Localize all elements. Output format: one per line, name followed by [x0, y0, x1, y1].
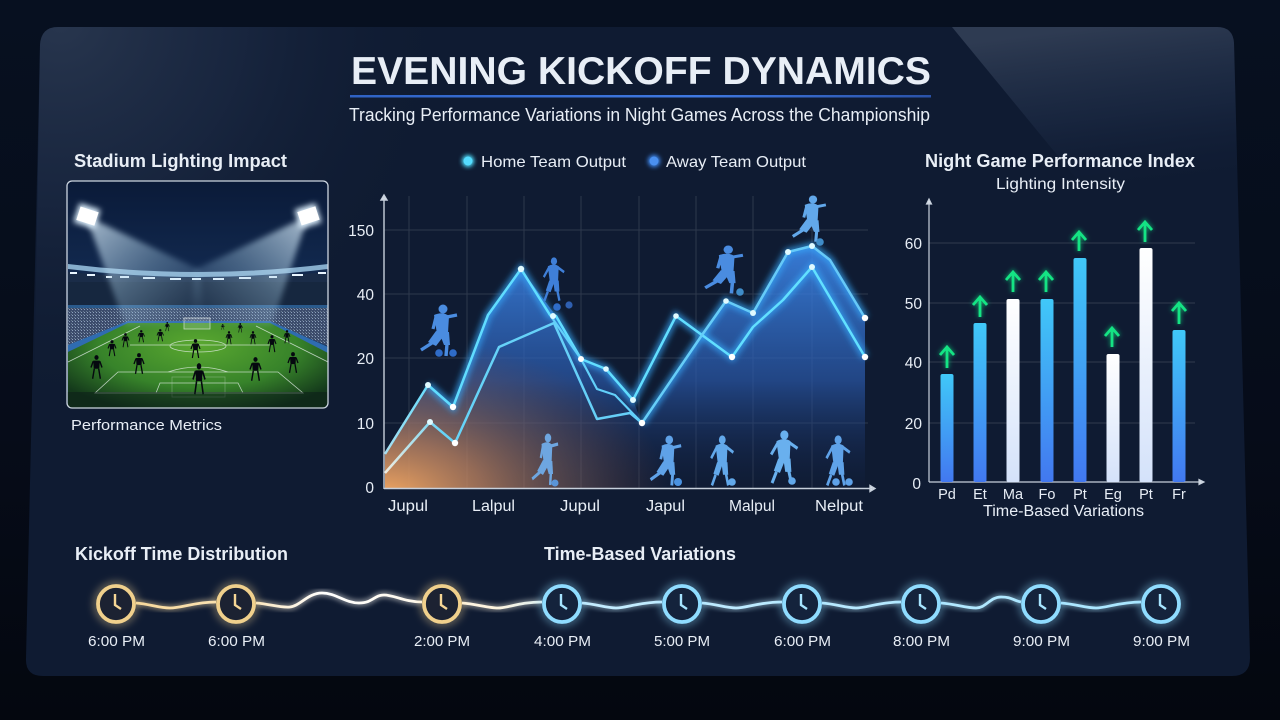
- title: EVENING KICKOFF DYNAMICS: [351, 50, 931, 93]
- x axis labels: Malpul: [729, 498, 775, 515]
- category labels: Et: [973, 487, 987, 503]
- clock node: 6:00 PM: 6:00 PM: [774, 633, 831, 650]
- clock node: 6:00 PM: [88, 585, 145, 650]
- x axis: [384, 486, 875, 492]
- y axis labels: 40: [905, 355, 922, 372]
- y axis labels: 0: [365, 480, 374, 497]
- x axis: [929, 480, 1204, 484]
- panel: stadium photo illustration: [67, 181, 328, 408]
- x axis labels: Japul: [646, 498, 685, 515]
- x axis labels: Nelput: [815, 498, 864, 515]
- y axis labels: 40: [357, 287, 374, 304]
- title underline: [350, 95, 931, 98]
- y axis labels: 20: [905, 416, 922, 433]
- y axis labels: 150: [348, 223, 374, 240]
- clock node: 2:00 PM: [414, 585, 470, 650]
- wave connector: [136, 593, 1141, 608]
- data points: [425, 243, 868, 446]
- clock node: 9:00 PM: 9:00 PM: [1013, 633, 1070, 650]
- y axis labels: 10: [357, 416, 374, 433]
- legend: Away Team Output: [666, 154, 807, 171]
- bars: [940, 248, 1186, 482]
- clock node: 8:00 PM: 8:00 PM: [893, 633, 950, 650]
- heading: night game performance index: Night Game Performance Index: [925, 151, 1195, 171]
- player silhouette: [532, 434, 558, 486]
- category labels: Ma: [1003, 487, 1024, 503]
- y axis labels: 50: [905, 296, 922, 313]
- player silhouette: [793, 195, 826, 246]
- clock node: 4:00 PM: [534, 585, 591, 650]
- player silhouette: [651, 435, 682, 486]
- y axis labels: 0: [912, 476, 921, 493]
- clock node: 9:00 PM: [1133, 585, 1190, 650]
- player silhouette: [771, 430, 798, 485]
- clock node: 9:00 PM: 9:00 PM: [1133, 633, 1190, 650]
- y axis: [926, 199, 932, 482]
- player silhouette: [826, 435, 853, 486]
- x axis labels: [388, 498, 864, 515]
- subtitle: Tracking Performance Variations in Night Games Across the Championship: [349, 105, 930, 125]
- legend: Home Team Output: [481, 154, 627, 171]
- y axis: [381, 195, 387, 489]
- player silhouette: [705, 245, 744, 296]
- clock node: 2:00 PM: 2:00 PM: [414, 633, 470, 650]
- clock node: 4:00 PM: 4:00 PM: [534, 633, 591, 650]
- category labels: Fo: [1039, 487, 1055, 503]
- clock node: 6:00 PM: 6:00 PM: [88, 633, 145, 650]
- category labels: [938, 487, 1186, 503]
- clock node: 8:00 PM: [893, 585, 950, 650]
- legend: [462, 154, 807, 171]
- category labels: Pd: [938, 487, 956, 503]
- clock node: 6:00 PM: [774, 585, 831, 650]
- clock node: 6:00 PM: [208, 585, 265, 650]
- heading: stadium lighting impact: Stadium Lighting Impact: [74, 151, 287, 171]
- category labels: Fr: [1172, 487, 1186, 503]
- clock node: 9:00 PM: [1013, 585, 1070, 650]
- x axis title: Time-Based Variations: [983, 503, 1144, 520]
- subheading: lighting intensity: Lighting Intensity: [996, 176, 1125, 193]
- clock node: 6:00 PM: 6:00 PM: [208, 633, 265, 650]
- y axis labels: [905, 236, 922, 493]
- chart: night game performance bars: [905, 199, 1204, 520]
- category labels: Eg: [1104, 487, 1122, 503]
- category labels: Pt: [1139, 487, 1153, 503]
- player silhouette: [544, 257, 573, 311]
- timeline: [88, 585, 1190, 650]
- heading: kickoff time distribution: Kickoff Time Distribution: [75, 544, 288, 564]
- area fill under lines: [385, 246, 865, 488]
- line: home team output: [385, 267, 865, 454]
- player silhouette: [711, 435, 736, 486]
- x axis labels: Jupul: [560, 498, 600, 515]
- player silhouette: [421, 304, 457, 357]
- line: away team output: [385, 246, 865, 473]
- x axis labels: Jupul: [388, 498, 428, 515]
- y axis labels: 60: [905, 236, 922, 253]
- category labels: Pt: [1073, 487, 1087, 503]
- chart: home and away team output line chart: [348, 195, 875, 515]
- clock node: 5:00 PM: 5:00 PM: [654, 633, 710, 650]
- heading: time-based variations: Time-Based Variations: [544, 544, 736, 564]
- y axis labels: 20: [357, 351, 374, 368]
- y axis labels: [348, 223, 374, 497]
- line glow: [428, 246, 865, 423]
- clock node: 5:00 PM: [654, 585, 710, 650]
- x axis labels: Lalpul: [472, 498, 515, 515]
- line: secondary trace: [550, 315, 642, 423]
- green up arrows: [940, 222, 1186, 368]
- caption: performance metrics: Performance Metrics: [71, 417, 222, 434]
